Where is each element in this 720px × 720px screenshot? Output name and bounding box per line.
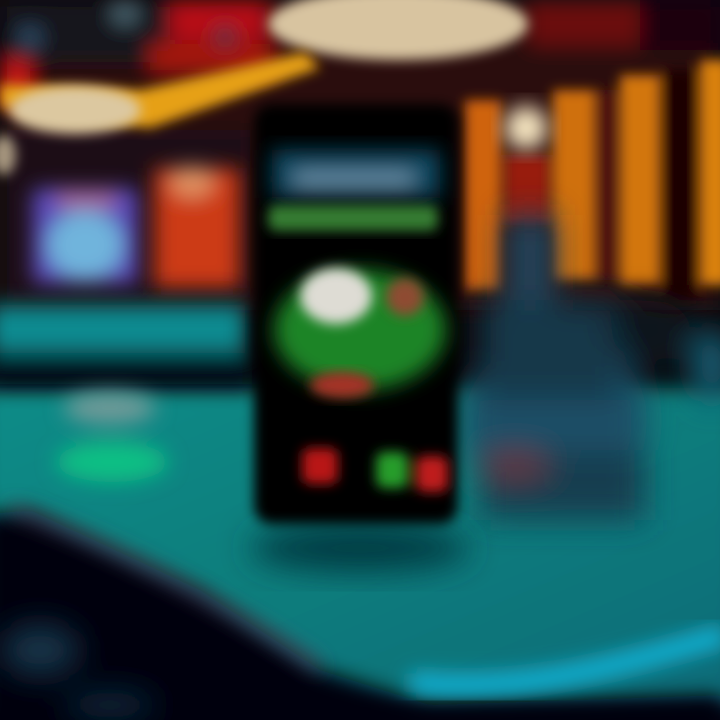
red card [310, 372, 374, 398]
purple screen panel [32, 188, 138, 284]
bottom left blue blobs [0, 624, 156, 719]
orange columns right [465, 60, 720, 300]
casino back wall [0, 0, 720, 310]
black table edge foreground [0, 510, 720, 720]
teal strip left [0, 305, 252, 384]
green poker table [274, 270, 446, 390]
screen header blue [272, 150, 440, 198]
cream lamp left [0, 86, 141, 175]
yellow ceiling band [0, 52, 320, 128]
screen green band [268, 205, 438, 231]
white chip [300, 268, 372, 324]
teal table surface [0, 388, 720, 708]
top cream sign [268, 0, 528, 60]
cyan glow edge [410, 635, 720, 685]
smartphone [250, 104, 470, 572]
blue bottle [463, 215, 720, 520]
grey blob and green glow [56, 392, 168, 482]
phone body [254, 104, 458, 524]
orange chip [386, 278, 424, 316]
table edge highlight [10, 508, 320, 668]
orange red panel [154, 166, 240, 288]
phone shadow on table [250, 524, 470, 572]
bottom buttons [302, 448, 448, 492]
white glow [504, 106, 548, 150]
